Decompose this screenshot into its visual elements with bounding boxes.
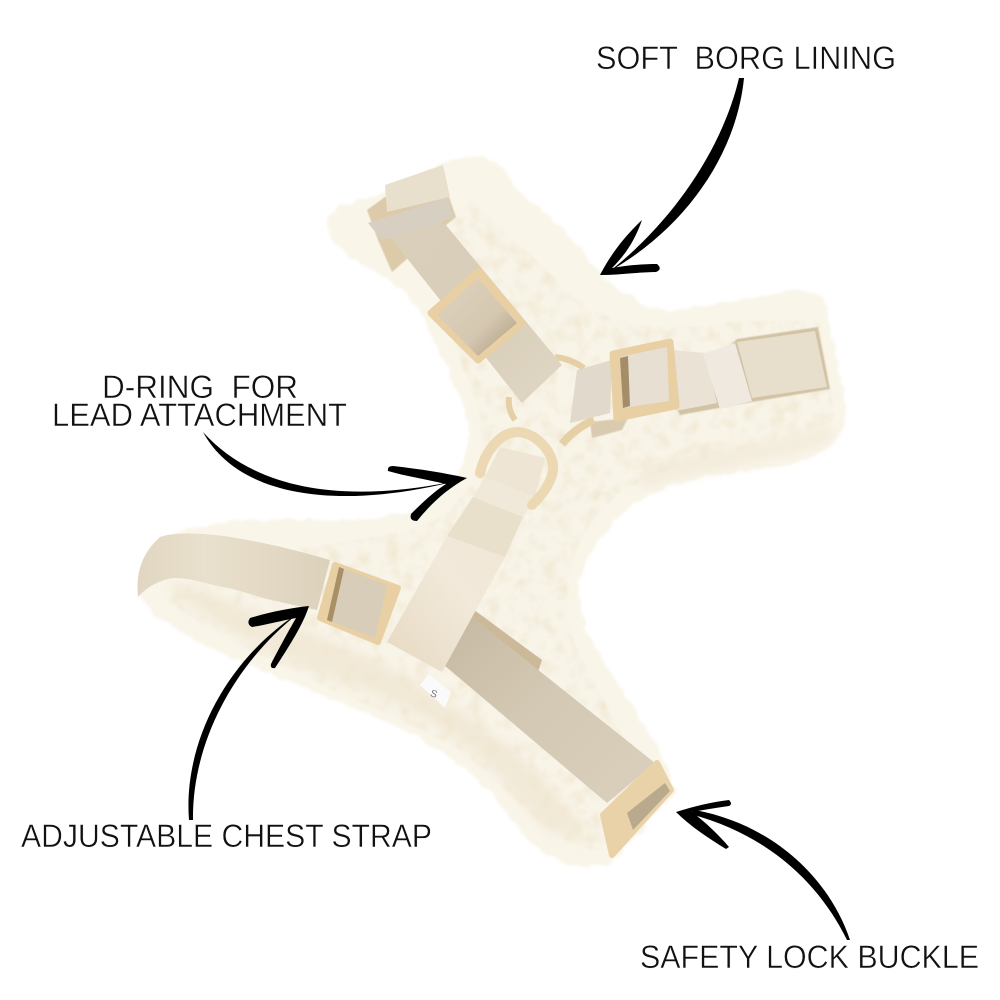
fleece texture [165,200,835,850]
arrow: D-ring [203,432,467,521]
size label: S [429,688,439,701]
label: D-ring for lead attachment [52,369,347,433]
label: D-ring for lead attachment: D-RING FOR [102,369,298,405]
strap end patch [385,165,450,212]
size label [420,674,451,708]
right adjuster buckle [613,342,676,418]
left adjuster buckle [320,565,398,642]
label: soft borg lining: SOFT BORG LINING [596,40,896,76]
upper strap [368,165,562,403]
satin lower section [387,497,523,672]
strap end patch [737,331,827,398]
connecting ring [509,357,594,444]
fleece right lobe shading [640,425,835,490]
label: safety lock buckle: SAFETY LOCK BUCKLE [640,939,979,975]
arrow: soft borg lining [600,78,744,275]
beige patch under junction [590,418,628,438]
beige lining behind right strap [672,327,830,415]
right strap [570,331,827,423]
label: D-ring for lead attachment: LEAD ATTACHMENT [52,397,347,433]
label: adjustable chest strap: ADJUSTABLE CHEST STRAP [21,818,432,854]
fleece body [141,155,846,867]
strap fold [473,477,535,517]
center strap [387,447,545,672]
lower strap [444,610,655,803]
arrow: chest strap [188,606,309,820]
chest strap [138,533,330,610]
arrow: safety lock buckle [676,800,850,940]
beige lining behind upper strap [367,180,456,272]
woven section [447,497,523,557]
fuzzy strap end [485,447,545,497]
brown strap edge [463,604,542,672]
safety lock buckle [603,763,671,855]
strap keeper [703,343,752,409]
D-ring [480,432,553,505]
strap keeper [368,197,453,240]
upper adjuster buckle [431,271,522,360]
fleece lower shading [170,580,590,840]
harness product [138,155,846,867]
